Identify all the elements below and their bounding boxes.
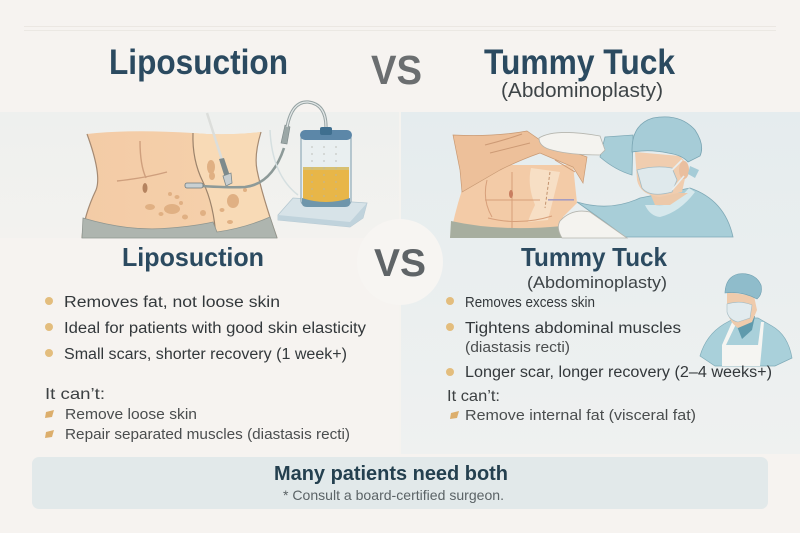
connector and hose bbox=[281, 125, 290, 144]
subheading bbox=[521, 242, 667, 292]
badge: VS circle bbox=[357, 219, 443, 305]
benefit list: Ideal for patients with good skin elasticity bbox=[64, 320, 366, 337]
sleeve bbox=[600, 135, 633, 175]
upper glove bbox=[539, 132, 605, 155]
heading: Tummy Tuck: (Abdominoplasty) bbox=[501, 80, 663, 102]
cannula tube bbox=[188, 148, 284, 187]
panel: tummy tuck details bbox=[446, 242, 792, 424]
surgeon gown bbox=[577, 188, 733, 237]
icon: surgeon with apron bbox=[700, 274, 792, 366]
callout: many patients need both bbox=[32, 457, 768, 509]
panel: liposuction details bbox=[45, 242, 366, 443]
heading: VS: VS bbox=[371, 47, 422, 93]
lifted skin flap bbox=[453, 131, 587, 192]
surgical cap bbox=[632, 117, 702, 162]
face bbox=[635, 152, 688, 197]
heading: Liposuction: Liposuction bbox=[109, 43, 288, 82]
illustration: tummy tuck surgeon lifting skin bbox=[450, 117, 733, 238]
benefit list: (diastasis recti) bbox=[465, 340, 570, 356]
torso bbox=[82, 131, 277, 238]
limitations: Repair separated muscles (diastasis recti) bbox=[65, 427, 350, 443]
subheading: Tummy Tuck bbox=[521, 242, 667, 272]
limitations: Remove loose skin bbox=[65, 407, 197, 423]
limitations bbox=[447, 388, 696, 424]
limitations: Remove internal fat (visceral fat) bbox=[465, 408, 696, 424]
thin instrument bbox=[207, 113, 223, 163]
benefit list: Removes excess skin bbox=[465, 295, 595, 311]
callout: many patients need both: Many patients need both bbox=[274, 463, 508, 485]
abdomen bbox=[450, 165, 577, 238]
heading: Tummy Tuck: Tummy Tuck bbox=[484, 43, 675, 82]
benefit list bbox=[446, 295, 772, 381]
benefit list: Small scars, shorter recovery (1 week+) bbox=[64, 346, 347, 363]
panel: vertical divider bbox=[399, 112, 401, 454]
subheading: (Abdominoplasty) bbox=[527, 273, 667, 292]
collection jar bbox=[301, 133, 351, 205]
callout: many patients need both: * Consult a board-certified surgeon. bbox=[283, 487, 504, 503]
fat spots bbox=[145, 160, 247, 224]
subheading: Liposuction bbox=[122, 242, 264, 272]
limitations: It can’t: bbox=[45, 386, 105, 403]
underwear bbox=[82, 217, 277, 238]
limitations bbox=[45, 386, 350, 443]
lower glove bbox=[558, 211, 627, 238]
benefit list: Longer scar, longer recovery (2–4 weeks+) bbox=[465, 364, 772, 381]
panel: liposuction illustration background bbox=[0, 112, 399, 238]
heading: Tummy Tuck bbox=[484, 43, 675, 102]
benefit list: Tightens abdominal muscles bbox=[465, 320, 681, 337]
underwear bbox=[450, 221, 565, 238]
base plate bbox=[278, 198, 367, 227]
benefit list: Removes fat, not loose skin bbox=[64, 294, 280, 311]
badge: VS circle: VS bbox=[374, 242, 426, 285]
illustration: liposuction torso and cannula bbox=[82, 102, 367, 238]
surgical mask bbox=[637, 167, 677, 194]
panel: tummy tuck background bbox=[401, 112, 800, 454]
limitations: It can’t: bbox=[447, 388, 500, 405]
benefit list bbox=[45, 294, 366, 363]
